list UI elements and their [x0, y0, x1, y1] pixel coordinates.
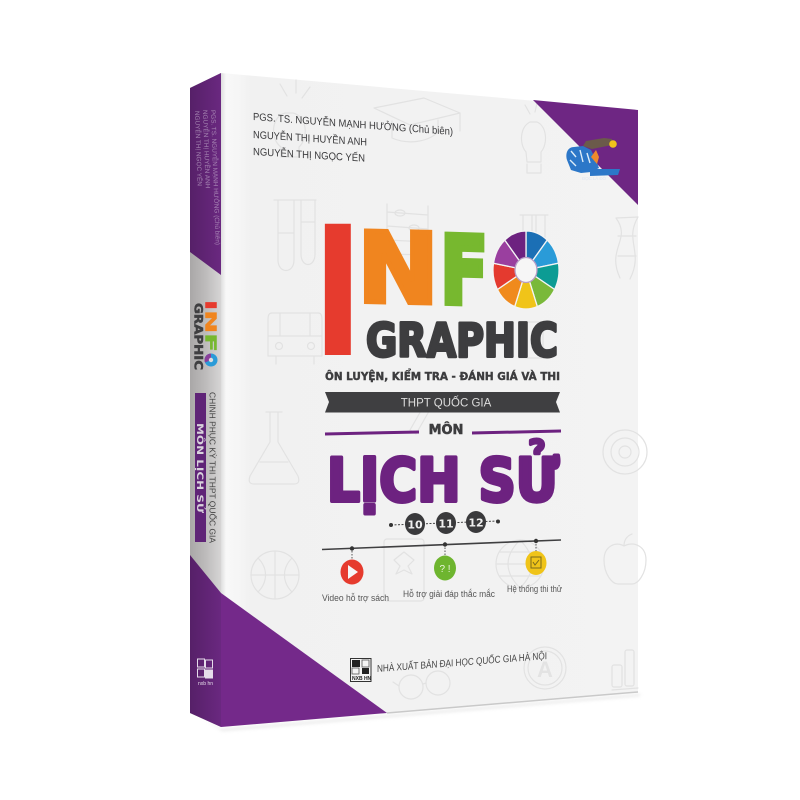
icon: letter A badge	[524, 647, 566, 689]
badge 11: 11	[438, 518, 454, 530]
book spine	[190, 73, 223, 727]
icon: letter A badge: A	[537, 657, 553, 682]
icon: tools top centre	[410, 402, 432, 434]
authors: NGUYỄN THỊ HUYỀN ANH	[253, 128, 367, 149]
icon: publisher logo: NXB HN	[352, 676, 372, 682]
spine title box: MÔN LỊCH SỬ	[194, 423, 207, 514]
heading: Môn	[325, 422, 561, 438]
banner: THPT Quốc Gia: THPT QUỐC GIA	[401, 396, 492, 410]
feature: video	[322, 560, 389, 603]
icon: abacus	[387, 204, 428, 264]
icon: globe	[496, 540, 544, 588]
publisher block	[350, 648, 547, 682]
title GRAPHIC: GRAPHIC	[366, 314, 558, 368]
grade badges	[389, 511, 500, 535]
letter I: I	[312, 188, 364, 398]
icon: phone	[384, 539, 424, 601]
spine authors: PGS. TS. NGUYỄN MẠNH HƯỞNG (Chủ biên)	[209, 110, 223, 245]
icon: glasses	[393, 671, 450, 699]
corner triangle bottom left	[221, 593, 387, 727]
letter F: F	[441, 217, 488, 327]
icon: lightbulb top right	[521, 103, 546, 173]
icon: basketball	[251, 551, 299, 599]
timeline	[322, 539, 562, 603]
spine authors: NGUYỄN THỊ NGỌC YẾN	[193, 111, 206, 186]
spine publisher logo	[198, 659, 213, 687]
icon: graduation cap	[374, 98, 460, 142]
feature: tests: Hệ thống thi thử	[507, 584, 562, 594]
icon: column building	[519, 322, 549, 358]
feature: tests	[507, 551, 562, 594]
badge 12: 12	[468, 516, 484, 530]
spine publisher logo: nxb hn	[198, 681, 213, 687]
icon: publisher logo	[350, 658, 372, 682]
icon: flask	[249, 412, 299, 484]
icon: beakers	[520, 215, 548, 251]
icon: apple	[604, 534, 646, 584]
corner triangle top right	[533, 100, 638, 205]
spine logo INFO	[202, 300, 220, 366]
heading: Lịch Sử: LỊCH SỬ	[327, 438, 559, 516]
icon: bus	[268, 313, 322, 364]
spine title box	[194, 393, 207, 542]
cover bottom edge	[387, 692, 638, 713]
banner: THPT Quốc Gia	[325, 392, 560, 412]
icon: publisher mascot logo	[566, 138, 620, 181]
book shadow	[200, 694, 640, 731]
heading: Môn: MÔN	[429, 422, 463, 438]
icon: publisher mascot logo: ĐỌC LÀ ĐỖ	[582, 175, 606, 181]
icon: dna ladder	[616, 217, 638, 279]
subtitle: ÔN LUYỆN, KIỂM TRA - ĐÁNH GIÁ VÀ THI	[325, 368, 560, 383]
book artwork	[190, 73, 647, 731]
feature: questions: Hỗ trợ giải đáp thắc mắc	[403, 589, 495, 599]
authors	[253, 110, 453, 165]
feature: questions: ? !	[439, 564, 451, 575]
letter N: N	[358, 212, 439, 326]
icon: test tubes	[274, 200, 316, 270]
feature: questions	[403, 556, 495, 599]
icon: target	[603, 430, 647, 474]
title INFO	[312, 188, 559, 398]
publisher name: NHÀ XUẤT BẢN ĐẠI HỌC QUỐC GIA HÀ NỘI	[377, 648, 547, 675]
spine logo GRAPHIC: GRAPHIC	[192, 303, 206, 370]
colour wheel O	[493, 231, 559, 309]
authors: PGS. TS. NGUYỄN MẠNH HƯỞNG (Chủ biên)	[253, 110, 453, 138]
feature: video: Video hỗ trợ sách	[322, 593, 389, 603]
spine subtitle: CHINH PHỤC KỲ THI THPT QUỐC GIA	[208, 392, 218, 543]
spine authors	[193, 110, 223, 245]
background line icons	[249, 80, 647, 699]
spine authors: NGUYỄN THỊ HUYỀN ANH	[201, 110, 214, 189]
badge 10: 10	[407, 518, 423, 532]
authors: NGUYỄN THỊ NGỌC YẾN	[253, 145, 365, 165]
icon: books	[612, 650, 638, 690]
spine logo INFO: I N F	[202, 300, 220, 352]
icon: lightbulb top left	[274, 80, 310, 157]
front cover	[221, 73, 638, 727]
